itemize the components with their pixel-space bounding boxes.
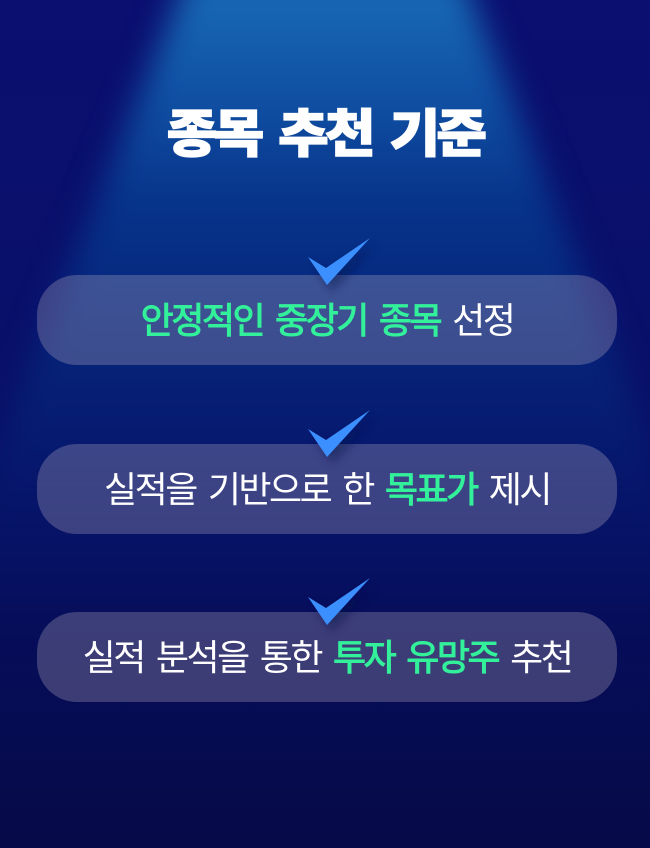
criterion 2 text: 실적을 기반으로 한 목표가 제시 bbox=[104, 469, 550, 510]
pill background 2 bbox=[37, 444, 617, 534]
icon: check mark 1 bbox=[308, 238, 370, 291]
criterion 3 text: 실적 분석을 통한 투자 유망주 추천 bbox=[83, 637, 571, 678]
criterion 2 bbox=[37, 410, 617, 534]
pill background 1 bbox=[37, 275, 617, 365]
criterion 1 bbox=[37, 238, 617, 365]
icon: check mark 3 bbox=[308, 578, 370, 630]
title: 종목 추천 기준 bbox=[167, 105, 483, 163]
icon: check mark 2 bbox=[308, 410, 370, 462]
criterion 1 text: 안정적인 중장기 종목 선정 bbox=[141, 300, 513, 341]
criterion 3 bbox=[37, 578, 617, 702]
pill background 3 bbox=[37, 612, 617, 702]
